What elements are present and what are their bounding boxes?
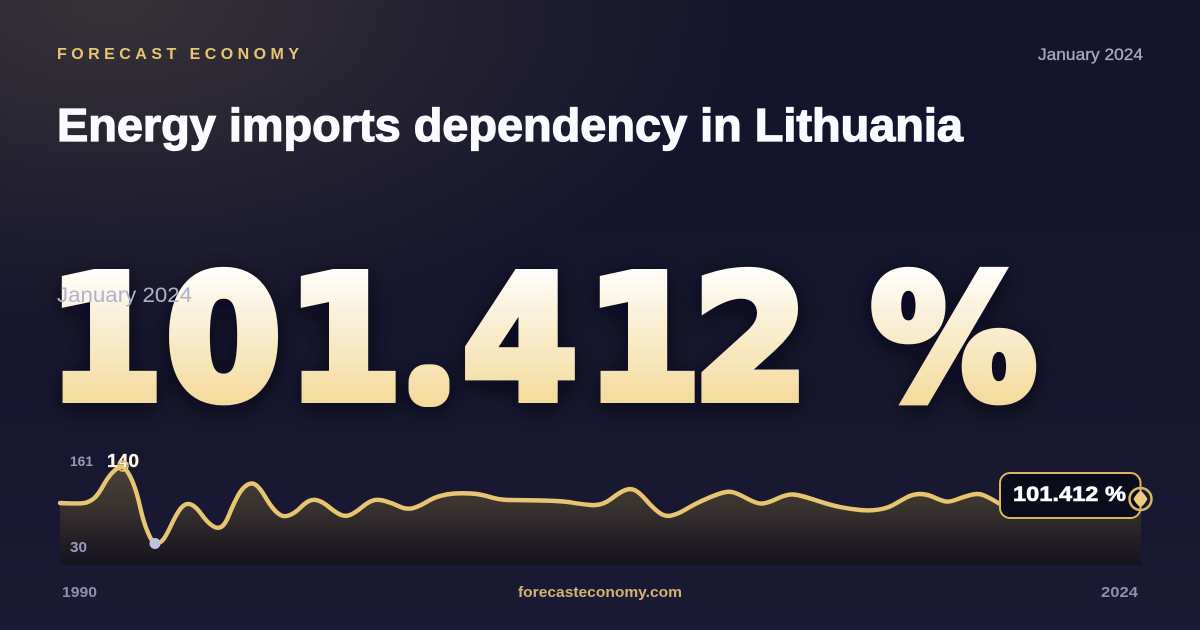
big value: 101 xyxy=(48,240,402,439)
low marker xyxy=(150,538,160,549)
axis max: 161 xyxy=(70,453,93,469)
end marker xyxy=(1130,488,1152,510)
value callout xyxy=(1000,473,1140,518)
brand label: FORECAST ECONOMY xyxy=(57,46,299,63)
date overlay: January 2024 xyxy=(57,284,192,307)
date top right: January 2024 xyxy=(1038,46,1143,64)
axis min: 30 xyxy=(70,540,87,556)
big value: . xyxy=(422,353,436,400)
peak marker xyxy=(118,461,128,471)
area fill xyxy=(60,467,1141,565)
start year: 1990 xyxy=(62,584,97,601)
title: Energy imports dependency in Lithuania xyxy=(57,99,963,151)
line xyxy=(60,467,1000,543)
peak label: 140 xyxy=(107,451,139,471)
end year: 2024 xyxy=(1101,584,1139,601)
website: forecasteconomy.com xyxy=(518,584,682,601)
sparkline chart xyxy=(60,451,1152,565)
value callout: 101.412 % xyxy=(1013,482,1126,506)
big value: 412 % xyxy=(462,240,1037,439)
big value xyxy=(48,240,1037,439)
